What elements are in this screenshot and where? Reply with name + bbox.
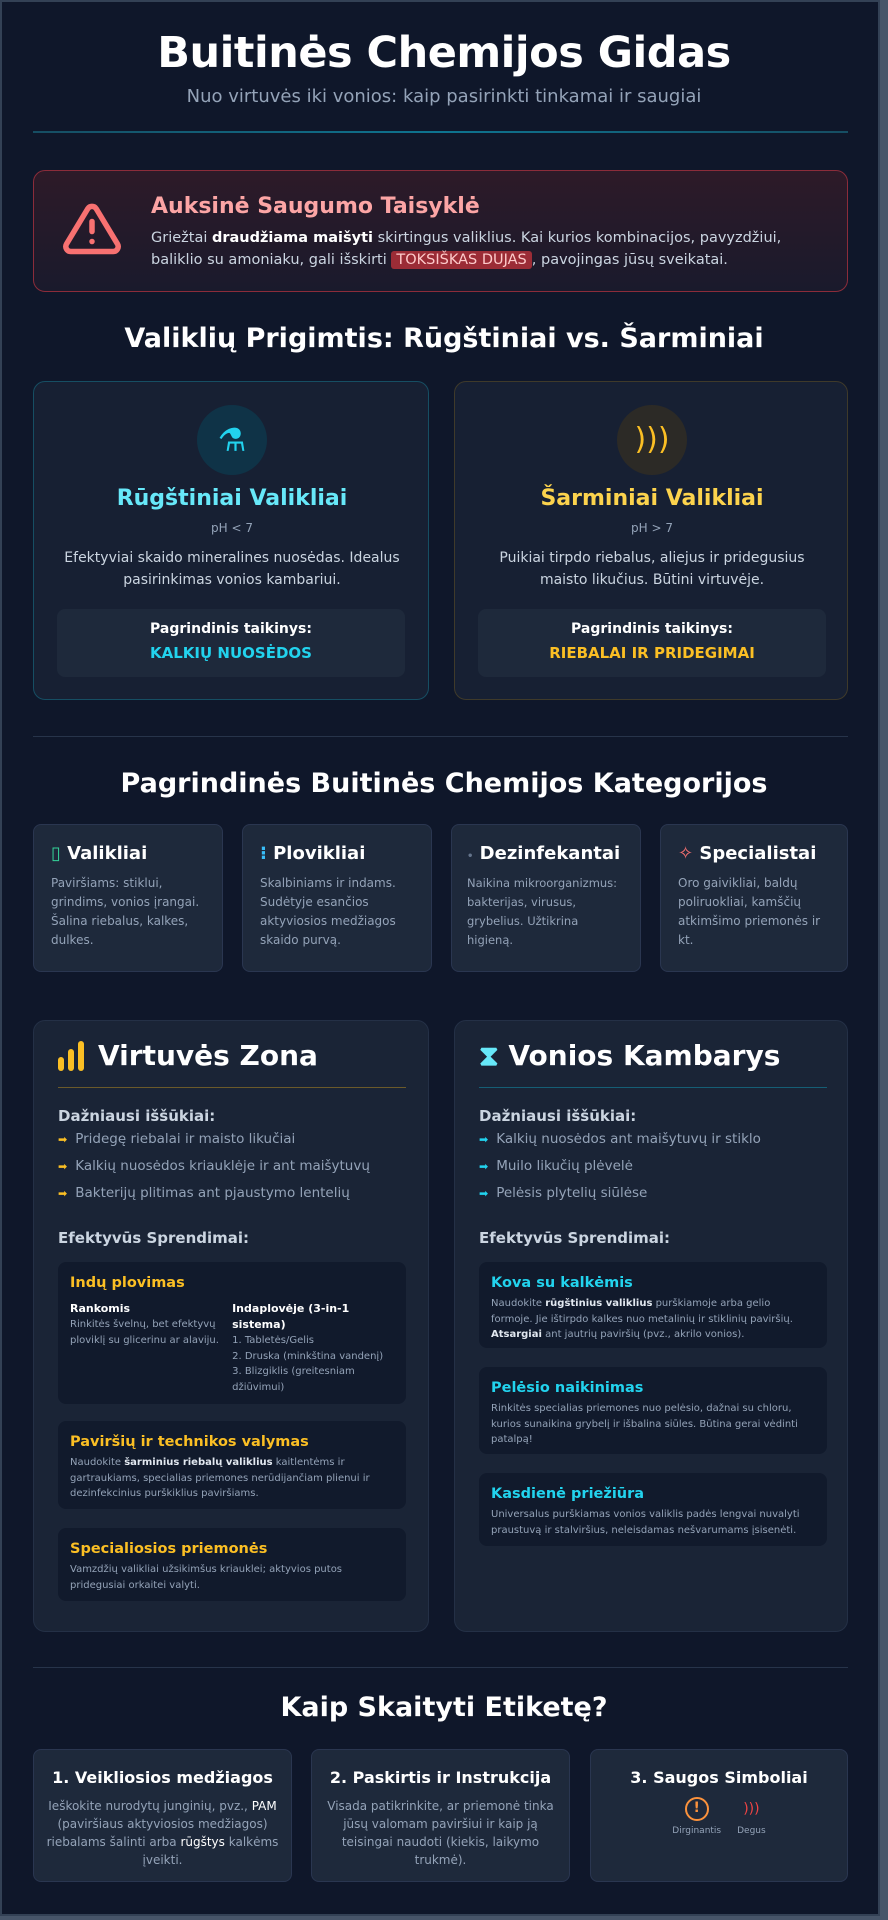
step 3 — [590, 1749, 848, 1882]
kitchen challenges: ➡ Pridegę riebalai ir maisto likučiai — [58, 1131, 295, 1147]
alkaline target — [478, 609, 826, 677]
step 2: 2. Paskirtis ir Instrukcija — [330, 1768, 551, 1787]
category: Dezinfekantai: • Dezinfekantai — [467, 843, 620, 864]
category: Valikliai — [33, 824, 223, 972]
solution: dishes: 3. Blizgiklis (greitesniam džiūvimui) — [232, 1366, 355, 1392]
solution: mold: Pelėsio naikinimas — [491, 1380, 643, 1396]
panel: bathroom — [454, 1020, 848, 1632]
bathroom challenges: ➡ Pelėsis plytelių siūlėse — [479, 1185, 647, 1201]
acid target: KALKIŲ NUOSĖDOS — [150, 644, 312, 662]
alkaline title: Šarminiai Valikliai — [540, 486, 764, 511]
category: Specialistai: Oro gaivikliai, baldų poliruokliai, kamščių atkimšimo priemonės ir kt. — [678, 876, 820, 947]
title: Buitinės Chemijos Gidas — [157, 28, 731, 78]
subtitle: Nuo virtuvės iki vonios: kaip pasirinkti tinkamai ir saugiai — [187, 86, 701, 107]
safety icons — [672, 1797, 766, 1836]
category: Valikliai: ▯ Valikliai — [51, 843, 147, 864]
alkaline desc: Puikiai tirpdo riebalus, aliejus ir pridegusius maisto likučius. Būtini virtuvėje. — [499, 550, 805, 588]
acid target: Pagrindinis taikinys: — [150, 621, 312, 637]
kitchen challenges: ➡ Kalkių nuosėdos kriauklėje ir ant maišytuvų — [58, 1158, 370, 1174]
icon: warning — [63, 204, 121, 254]
icon: alkaline: ))) — [634, 422, 670, 457]
step 2: Visada patikrinkite, ar priemonė tinka jūsų valomam paviršiui ir kaip ją teisingai naudoti (kiekis, laikymo trukmė). — [327, 1799, 554, 1867]
solution: surfaces — [58, 1421, 406, 1509]
icon: alkaline — [617, 405, 687, 475]
category: Specialistai: ✧ Specialistai — [678, 843, 816, 864]
acid target — [57, 609, 405, 677]
callout: safety rule — [33, 170, 848, 292]
category: Specialistai — [660, 824, 848, 972]
bathroom challenges — [479, 1131, 761, 1201]
heading: categories: Pagrindinės Buitinės Chemijos Kategorijos — [121, 768, 767, 799]
solution: mold: Rinkitės specialias priemones nuo pelėsio, dažnai su chloru, kurios sunaikina grybelį ir išbalina siūles. Būtina gerai vėdinti patalpą! — [491, 1403, 798, 1445]
alkaline target: Pagrindinis taikinys: — [571, 621, 733, 637]
acid desc: Efektyviai skaido mineralines nuosėdas. Idealus pasirinkimas vonios kambariui. — [64, 550, 400, 588]
heading: labels: Kaip Skaityti Etiketę? — [280, 1692, 608, 1723]
panel: categories — [33, 824, 848, 972]
solution: surfaces: Paviršių ir technikos valymas — [70, 1434, 309, 1450]
step 2 — [311, 1749, 570, 1882]
kitchen challenges — [58, 1131, 370, 1201]
solution: special: Specialiosios priemonės — [70, 1541, 267, 1557]
solution: dishes: Rankomis — [70, 1302, 130, 1315]
solution: daily: Kasdienė priežiūra — [491, 1486, 644, 1502]
solution: dishes — [58, 1262, 406, 1404]
panel: label reading — [33, 1749, 848, 1882]
step 1 — [33, 1749, 292, 1882]
alkaline target: RIEBALAI IR PRIDEGIMAI — [549, 644, 755, 662]
solution: dishes: Indų plovimas — [70, 1275, 185, 1291]
solution: daily: Universalus purškiamas vonios valiklis padės lengvai nuvalyti praustuvą ir stalviršius, neleisdamas nešvarumams įsisenėti. — [491, 1509, 800, 1536]
icon: acid — [197, 405, 267, 475]
solution: surfaces: Naudokite šarminius riebalų valiklius kaitlentėms ir gartraukiams, specialias priemones nerūdijančiam plienui ir dezinfekcinius purškiklius paviršiams. — [70, 1457, 370, 1499]
step 1: Ieškokite nurodytų junginių, pvz., PAM (paviršiaus aktyviosios medžiagos) riebalams šalinti arba rūgštys kalkėms įveikti. — [47, 1799, 278, 1867]
safety icons: ))) — [743, 1801, 760, 1817]
category: Dezinfekantai — [451, 824, 641, 972]
bathroom heading: ⧗ Vonios Kambarys — [479, 1039, 780, 1072]
safety icons: Dirginantis — [672, 1826, 721, 1836]
panel: alkaline — [454, 381, 848, 700]
solution: limescale — [479, 1262, 827, 1348]
category: Plovikliai: ⁝ Plovikliai — [260, 843, 365, 864]
category: Valikliai: Paviršiams: stiklui, grindims, vonios įrangai. Šalina riebalus, kalkes, dulkes. — [51, 876, 199, 947]
kitchen heading: Virtuvės Zona — [98, 1039, 318, 1072]
panel: alkaline: pH > 7 — [631, 521, 673, 535]
solution: special — [58, 1528, 406, 1601]
bathroom challenges: ➡ Muilo likučių plėvelė — [479, 1158, 633, 1174]
solution: dishes: 1. Tabletės/Gelis — [232, 1335, 314, 1346]
solution: daily — [479, 1473, 827, 1546]
bathroom challenges: ➡ Kalkių nuosėdos ant maišytuvų ir stiklo — [479, 1131, 761, 1147]
step 1: 1. Veikliosios medžiagos — [52, 1768, 273, 1787]
panel: acidic — [33, 381, 429, 700]
solution: mold — [479, 1367, 827, 1454]
panel: kitchen: Efektyvūs Sprendimai: — [58, 1229, 249, 1247]
kitchen challenges: ➡ Bakterijų plitimas ant pjaustymo lentelių — [58, 1185, 350, 1201]
solution: limescale: Kova su kalkėmis — [491, 1275, 633, 1291]
solution: limescale: Naudokite rūgštinius valiklius purškiamoje arba gelio formoje. Jie ištirpdo kalkes nuo metalinių ir stiklinių paviršių. Atsargiai ant jautrių paviršių (pvz., akrilo vonios). — [491, 1298, 793, 1340]
acid title: Rūgštiniai Valikliai — [117, 486, 347, 511]
safety icons: ! — [694, 1800, 700, 1816]
icon: acid: ⚗ — [218, 421, 246, 459]
solution: dishes: 2. Druska (minkština vandenį) — [232, 1350, 383, 1362]
category: Plovikliai: Skalbiniams ir indams. Sudėtyje esančios aktyviosios medžiagos skaido purvą. — [260, 876, 396, 947]
heading: nature: Valiklių Prigimtis: Rūgštiniai vs. Šarminiai — [124, 323, 764, 354]
panel: bathroom: Dažniausi iššūkiai: — [479, 1107, 636, 1125]
callout text: Griežtai draudžiama maišyti skirtingus valiklius. Kai kurios kombinacijos, pavyzdžiui, baliklio su amoniaku, gali išskirti TOKSIŠKAS DUJAS , pavojingas jūsų sveikatai. — [151, 230, 781, 268]
step 3: 3. Saugos Simboliai — [630, 1768, 808, 1787]
solution: special: Vamzdžių valikliai užsikimšus kriauklei; aktyvios putos pridegusiai orkaitei valyti. — [70, 1564, 342, 1590]
solution: dishes: Rinkitės švelnų, bet efektyvų ploviklį su glicerinu ar alaviju. — [70, 1319, 219, 1346]
panel: kitchen — [33, 1020, 429, 1632]
panel: kitchen: Dažniausi iššūkiai: — [58, 1107, 215, 1125]
category: Plovikliai — [242, 824, 432, 972]
panel: acidic: pH < 7 — [211, 521, 253, 535]
panel: bathroom: Efektyvūs Sprendimai: — [479, 1229, 670, 1247]
safety icons: Degus — [737, 1826, 766, 1836]
callout title: Auksinė Saugumo Taisyklė — [151, 194, 480, 219]
solution: dishes: Indaplovėje (3-in-1 sistema) — [232, 1302, 349, 1331]
category: Dezinfekantai: Naikina mikroorganizmus: bakterijas, virusus, grybelius. Užtikrina higieną. — [467, 876, 617, 947]
